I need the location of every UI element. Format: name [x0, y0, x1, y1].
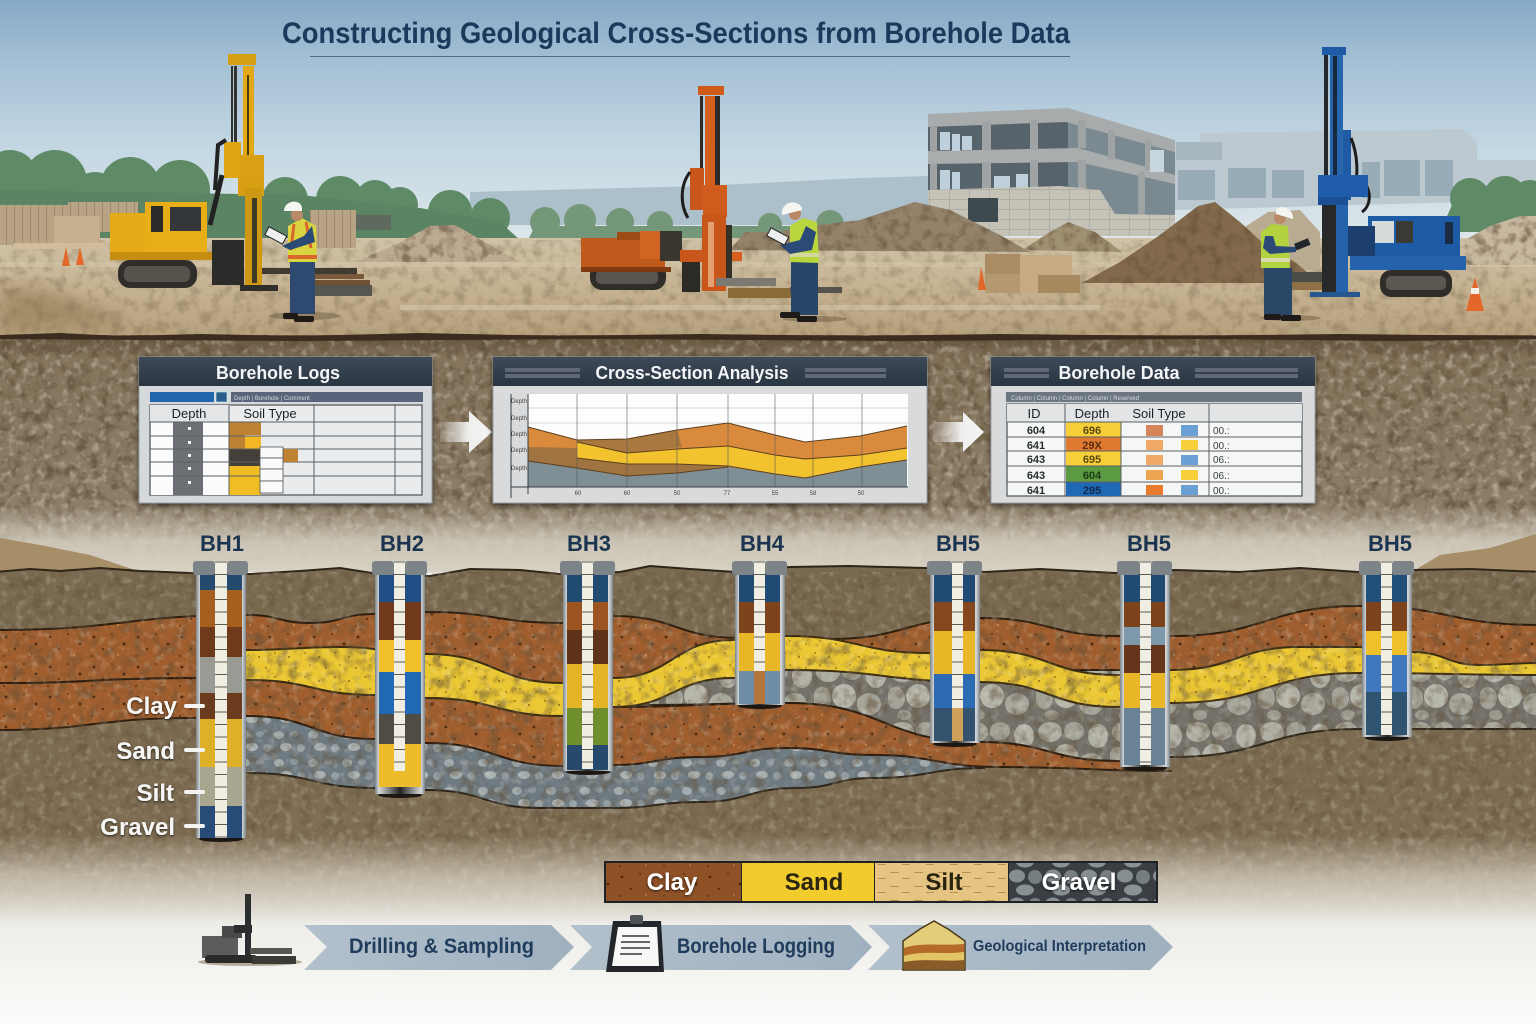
stratum: lower clay: [0, 678, 1172, 771]
legend: clay: Clay: [647, 869, 698, 896]
table values: 643: [1027, 470, 1045, 482]
table values: [1027, 425, 1102, 497]
borehole labels: [200, 531, 1412, 556]
chevron: Geological Interpretation: Geological Interpretation: [973, 938, 1146, 955]
soil type callouts on BH1: Silt: [137, 780, 174, 807]
toolbar: Depth | Borehole | Comment: [234, 396, 310, 402]
timber crates: [985, 254, 1080, 293]
blue drilling rig: [1290, 47, 1466, 297]
background office building: [1175, 129, 1536, 210]
borehole labels: BH5: [936, 531, 980, 556]
table values: 604: [1083, 470, 1102, 482]
legend: silt: [875, 863, 1008, 901]
chart axis labels: 60: [624, 491, 631, 497]
chart axis labels: 55: [772, 491, 779, 497]
data table: [1007, 404, 1302, 497]
footer fade: [0, 835, 1536, 1024]
stratum: lower gravel: [200, 700, 985, 808]
legend: gravel: Gravel: [1042, 869, 1116, 896]
chart axis labels: Depth: [511, 466, 527, 472]
subsurface texture: [0, 333, 1536, 572]
right tree line: [1440, 176, 1536, 232]
stratum: upper gravel: [640, 660, 1536, 761]
upper subsurface soil band: [0, 335, 1536, 570]
traffic cones: [62, 247, 1484, 311]
construction site ground: [0, 238, 1536, 338]
borehole BH2: [372, 561, 427, 798]
timber stacks left: [0, 202, 391, 249]
arrow: analysis to data: [933, 412, 984, 452]
table headers: Soil Type: [243, 406, 297, 421]
panel: Borehole Data: [991, 357, 1315, 503]
chart axis labels: 77: [724, 491, 731, 497]
background tree lines: [0, 150, 860, 240]
concrete building under construction: [928, 108, 1175, 236]
worker with blue rig: [1260, 207, 1320, 321]
panel: Cross-Section Analysis: [493, 357, 927, 503]
soil type callouts on BH1: Gravel: [100, 814, 175, 841]
borehole labels: BH2: [380, 531, 424, 556]
title underline: [310, 56, 1070, 57]
distant hazy hills: [470, 170, 1140, 225]
table headers: [172, 406, 297, 421]
toolbar: [1006, 392, 1302, 402]
table headers: Depth: [172, 406, 206, 421]
table headers: ID: [1028, 406, 1040, 421]
chart axis labels: Depth: [511, 448, 527, 454]
legend: [604, 861, 1158, 903]
borehole BH4: [732, 561, 787, 709]
data table: 00.:: [1213, 426, 1230, 437]
orange drilling rig: [581, 86, 742, 292]
chart axis labels: Depth: [511, 432, 527, 438]
table values: 643: [1027, 454, 1045, 466]
table values: 695: [1083, 454, 1101, 466]
chevron: Drilling & Sampling: [304, 925, 574, 970]
icon: clipboard: [606, 915, 664, 972]
yellow drilling rig: [110, 54, 278, 291]
sky background: [0, 0, 1536, 240]
title: Constructing Geological Cross-Sections from Borehole Data: [282, 17, 1070, 50]
borehole labels: BH4: [740, 531, 785, 556]
panel heading: Borehole Logs: [216, 363, 340, 383]
cross-section chart: [511, 394, 908, 498]
legend: sand: [742, 863, 874, 901]
data table: 00.:: [1213, 486, 1230, 497]
chart axis labels: 58: [810, 491, 817, 497]
pallet under orange rig: [716, 278, 842, 298]
soil type callouts on BH1: [100, 693, 205, 841]
legend: gravel: [1009, 863, 1156, 901]
stratum: sand: [220, 636, 1536, 716]
soil cross-section body: [0, 566, 1536, 935]
borehole labels: BH1: [200, 531, 244, 556]
borehole BH5 second: [1117, 561, 1172, 771]
legend: clay: [606, 863, 741, 901]
panel heading: Cross-Section Analysis: [596, 363, 788, 383]
table values: 29X: [1082, 440, 1102, 452]
toolbar: [150, 392, 423, 402]
table values: 604: [1027, 425, 1046, 437]
borehole BH3: [560, 561, 615, 775]
toolbar: Column | Column | Column | Column | Reserved: [1011, 396, 1139, 402]
chart axis labels: Depth: [511, 399, 527, 405]
borehole BH1: [193, 561, 248, 842]
table headers: Soil Type: [1132, 406, 1186, 421]
data table: 06.:: [1213, 471, 1230, 482]
chevron: Geological Interpretation: [868, 925, 1173, 970]
icon: small drill rig: [198, 894, 302, 966]
legend: silt: Silt: [925, 869, 963, 896]
chevron: Borehole Logging: Borehole Logging: [677, 935, 835, 958]
table headers: Depth: [1075, 406, 1109, 421]
chart axis labels: 50: [674, 491, 681, 497]
soil type callouts on BH1: Sand: [116, 738, 175, 765]
table values: 295: [1083, 485, 1101, 497]
surface mounds at section edges: [0, 534, 1536, 572]
stratum: upper clay: [0, 606, 1536, 700]
icon: geological strata block: [903, 921, 965, 970]
table values: 641: [1027, 485, 1045, 497]
chart axis labels: 60: [575, 491, 582, 497]
borehole labels: BH3: [567, 531, 611, 556]
soil grain texture: [0, 572, 1536, 930]
legend: sand: Sand: [785, 869, 843, 896]
worker with yellow rig: [265, 202, 341, 322]
log table: [150, 405, 422, 495]
pallet under yellow rig: [262, 268, 372, 296]
borehole BH5: [927, 561, 982, 747]
borehole labels: BH5: [1127, 531, 1171, 556]
table values: 696: [1083, 425, 1101, 437]
chevron: Borehole Logging: [570, 925, 872, 970]
chevron: Drilling & Sampling: Drilling & Sampling: [349, 935, 534, 958]
worker with orange rig: [767, 202, 847, 322]
data table: 00.:: [1213, 441, 1230, 452]
chart axis labels: [511, 399, 865, 497]
borehole BH5 third: [1359, 561, 1414, 741]
ground texture: [0, 240, 1536, 338]
soil spoil piles: [356, 202, 1536, 283]
chart axis labels: Depth: [511, 416, 527, 422]
borehole labels: BH5: [1368, 531, 1412, 556]
table values: 641: [1027, 440, 1045, 452]
arrow: logs to analysis: [440, 411, 492, 453]
chart axis labels: 50: [858, 491, 865, 497]
table headers: [1028, 406, 1186, 421]
panel: Borehole Logs: [139, 357, 432, 503]
data table: 06.:: [1213, 455, 1230, 466]
panel heading: Borehole Data: [1058, 363, 1180, 383]
soil type callouts on BH1: Clay: [126, 693, 178, 720]
